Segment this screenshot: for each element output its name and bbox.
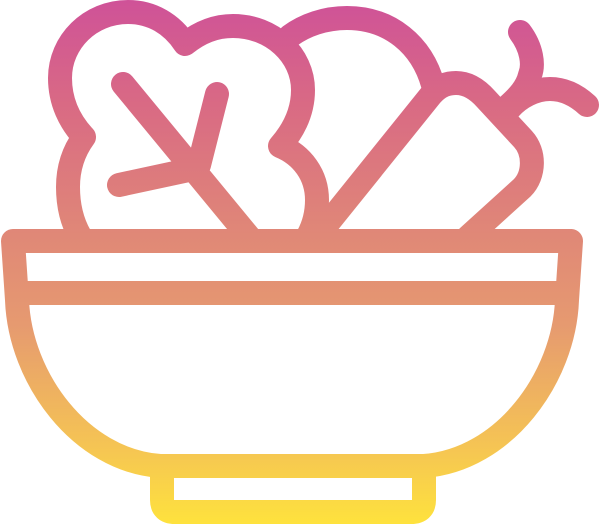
second leaf [290, 18, 433, 85]
leaf outline [60, 12, 317, 236]
carrot body [320, 83, 532, 237]
carrot stem upper [508, 32, 532, 106]
rim band [17, 281, 567, 305]
bowl foot [162, 466, 424, 512]
bowl body and rim [13, 241, 571, 466]
leaf veins [119, 84, 250, 238]
carrot stem right [510, 89, 587, 108]
